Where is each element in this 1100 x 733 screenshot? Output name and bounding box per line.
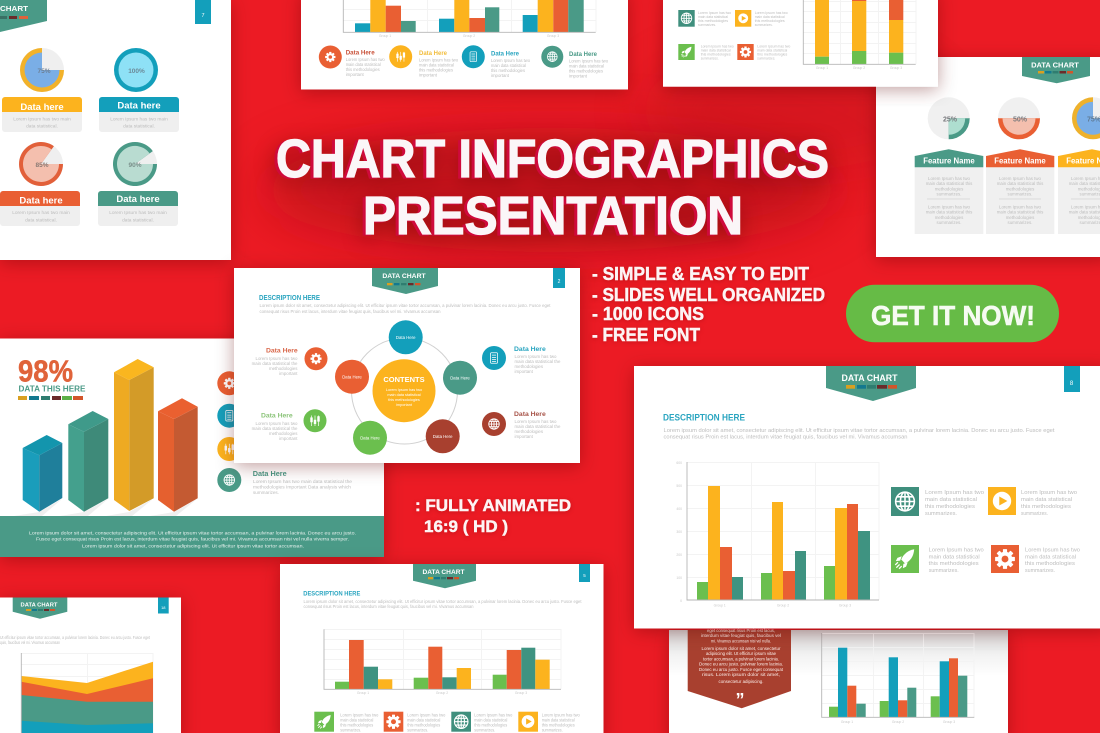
- node: top: Data Here: [396, 335, 416, 340]
- item: right bottom: Data Here: [514, 411, 546, 418]
- bar yellow: [114, 359, 154, 511]
- icon item: rocket: [314, 712, 379, 732]
- item: right top: main data statistical the: [514, 359, 561, 364]
- icon item: globe: summarizes.: [925, 511, 957, 517]
- center circle: contents: [372, 359, 436, 422]
- icon item: play: summarizes.: [1021, 511, 1048, 517]
- feature card teal: summarizes.: [937, 220, 961, 225]
- card: data here yellow: [2, 97, 82, 132]
- item: left top: [252, 347, 328, 376]
- card: data here green: data statistical.: [122, 218, 154, 224]
- icon item: play: this methodologies: [1021, 504, 1071, 510]
- bar chart: 400: [676, 507, 682, 511]
- item: right bottom: important: [514, 434, 534, 439]
- feature card teal: methodologies: [935, 186, 964, 191]
- donut 100%: [114, 48, 158, 92]
- icon item: rocket: main data statistical: [340, 718, 373, 722]
- teal footer band: [0, 516, 384, 557]
- feature card teal: methodologies: [935, 215, 964, 220]
- feature card teal: Lorem Ipsum has two: [928, 204, 971, 210]
- icon item: play: Lorem Ipsum has two: [542, 712, 580, 718]
- pie 25%: 25%: [943, 116, 958, 124]
- bar chart: 0: [680, 599, 682, 603]
- animation note: 16:9 ( HD ): [424, 517, 508, 536]
- icon item: gear: this methodologies: [407, 722, 441, 728]
- bar chart: Group 3: [547, 34, 559, 38]
- quote callout: eget consequat risus Proin est lacus,: [707, 628, 775, 633]
- item: yellow data here: main data statistical: [419, 62, 454, 68]
- icon item: gear: main data statistical: [757, 48, 787, 52]
- data here text: summarizes.: [253, 490, 279, 495]
- donut 75%: [20, 48, 64, 92]
- 3D bar chart: [14, 359, 198, 516]
- panel: top right stacked chart slide: [663, 0, 938, 87]
- item: yellow data here: important: [419, 72, 438, 78]
- description heading: DESCRIPTION HERE: [663, 413, 745, 424]
- node: right: [443, 361, 477, 395]
- item: blue data here: this methodologies: [491, 68, 526, 73]
- icon item: globe: main data statistical: [698, 15, 728, 19]
- animation note: : FULLY ANIMATED: [415, 496, 571, 515]
- card: data here yellow: Lorem Ipsum has two main: [13, 116, 71, 122]
- item: yellow data here: [389, 45, 459, 78]
- card: data here orange: Data here: [19, 196, 63, 206]
- bar chart: Group 1: [714, 604, 726, 608]
- icon item: rocket: Lorem Ipsum has two: [929, 548, 984, 554]
- bar teal: [68, 411, 108, 512]
- slide badge: DATA CHART: [382, 273, 426, 280]
- item: blue data here: important: [491, 73, 510, 78]
- icon item: globe: [451, 712, 513, 732]
- feature list: - 1000 ICONS: [592, 304, 704, 324]
- bar chart: 100: [676, 576, 682, 580]
- bar chart: [822, 633, 974, 724]
- card: data here teal blue: Data here: [117, 100, 161, 112]
- node: bottom right: [426, 419, 460, 453]
- card: data here teal blue: data statistical.: [123, 124, 155, 130]
- item: right bottom: main data statistical the: [514, 424, 561, 429]
- quote callout: interdum vitae feugiat quis, faucibus vel: [701, 633, 781, 638]
- icon item: rocket: summarizes.: [340, 728, 361, 732]
- pie 50%: 50%: [1013, 116, 1028, 124]
- icon item: play: this methodologies: [755, 19, 785, 23]
- button: get it now: [846, 285, 1059, 342]
- pie 25%: [928, 97, 970, 139]
- feature card orange: main data statistical this: [997, 210, 1044, 214]
- description heading: DESCRIPTION HERE: [303, 590, 361, 597]
- feature list: - SIMPLE & EASY TO EDIT: [592, 264, 809, 284]
- panel: bottom right chart slide: [669, 628, 1008, 733]
- slide number: 8: [1070, 381, 1074, 387]
- item: blue data here: [462, 45, 531, 78]
- item: right top: important: [514, 369, 534, 374]
- data here text: Lorem Ipsum has two main data statistical the: [253, 479, 353, 484]
- stacked bar chart: Group 2: [853, 66, 865, 70]
- icon item: play: this methodologies: [542, 722, 575, 728]
- item: teal data here: this methodologies: [569, 68, 604, 74]
- bar chart: Group 2: [777, 604, 789, 608]
- panel: donut charts slide: [0, 0, 231, 260]
- icon item: globe: this methodologies: [925, 504, 975, 510]
- bar chart: Group 3: [515, 691, 527, 695]
- item: blue data here: Lorem Ipsum has two: [491, 58, 531, 63]
- bar chart: Group 1: [379, 34, 391, 38]
- center circle: contents: main data statistical: [387, 393, 421, 397]
- stacked bar chart: Group 1: [816, 66, 828, 70]
- bar chart: [324, 629, 561, 695]
- slide badge: [372, 268, 438, 294]
- slide number: [158, 598, 169, 614]
- panel: bottom center chart slide: [280, 564, 604, 733]
- bar blue: [23, 435, 62, 512]
- card: data here green: [98, 191, 178, 226]
- feature card orange: Lorem Ipsum has two: [999, 176, 1042, 181]
- slide badge: [826, 366, 916, 401]
- icon item: globe: [891, 487, 984, 517]
- item: blue data here: Data Here: [491, 50, 519, 58]
- button: get it now: GET IT NOW!: [871, 300, 1035, 331]
- description text: consequat risus Proin est lacus, interdum vitae feugiat quis, faucibus vel mi. Vivamus accumsan: [260, 309, 441, 314]
- icon item: rocket: this methodologies: [929, 561, 979, 567]
- icon item: gear: [737, 44, 790, 60]
- icon item: gear: summarizes.: [407, 728, 428, 732]
- area chart: [21, 653, 153, 733]
- icon circles: [217, 371, 241, 492]
- icon item: rocket: [891, 545, 984, 574]
- quote callout: Donec eu arcu justo. Fusce eget consequat: [699, 667, 784, 672]
- feature card orange: Lorem Ipsum has two: [999, 204, 1042, 210]
- icon item: play: Lorem Ipsum has two: [1021, 490, 1077, 496]
- center circle: contents: important: [396, 403, 413, 407]
- item: left top: main data statistical the: [252, 361, 298, 366]
- bar chart: Group 1: [357, 691, 369, 695]
- title: [276, 129, 829, 246]
- bar chart: [343, 0, 596, 38]
- card: data here yellow: Data here: [20, 102, 64, 113]
- item: yellow data here: this methodologies: [419, 68, 454, 72]
- data here text: Data Here: [253, 469, 287, 478]
- description text: consequat risus Proin est lacus, interdum vitae feugiat quis, faucibus vel mi. Vivamus accumsan: [664, 434, 908, 440]
- bar chart: [676, 461, 879, 608]
- quote callout: Lorem ipsum dolor sit amet, consectetur: [702, 646, 781, 651]
- feature card teal: main data statistical this: [926, 210, 973, 214]
- bar chart: 200: [676, 553, 682, 557]
- title: CHART INFOGRAPHICS: [276, 129, 829, 189]
- item: orange data here: Lorem Ipsum has two: [346, 57, 385, 62]
- icon item: globe: this methodologies: [474, 722, 508, 728]
- slide number: 2: [558, 279, 561, 285]
- icon item: globe: [678, 10, 731, 27]
- item: right top: Data Here: [514, 346, 546, 353]
- bar chart: Group 2: [436, 691, 448, 695]
- item: teal data here: important: [569, 74, 588, 78]
- icon item: gear: Lorem Ipsum has two: [1025, 548, 1080, 554]
- card: data here yellow: data statistical.: [26, 124, 58, 130]
- icon item: play: summarizes.: [755, 23, 773, 27]
- item: teal data here: Data Here: [569, 51, 597, 58]
- bar chart: Group 3: [943, 720, 955, 724]
- item: teal data here: [541, 46, 609, 78]
- quote callout: risus. Lorem ipsum dolor sit amet,: [702, 672, 780, 677]
- feature card orange: methodologies: [1006, 186, 1035, 191]
- panel: contents cycle slide: [234, 268, 580, 463]
- icon item: gear: this methodologies: [757, 52, 788, 56]
- feature list: - SLIDES WELL ORGANIZED: [592, 285, 825, 305]
- feature list: [592, 264, 825, 345]
- animation note: [415, 496, 571, 536]
- node: bottom left: Data Here: [360, 436, 380, 440]
- quote callout: mi. Vivamus accumsan nisi vel nulla.: [711, 638, 771, 644]
- item: teal data here: main data statistical: [569, 64, 604, 68]
- description text: Lorem ipsum dolor sit amet, consectetur adipiscing elit. Ut efficitur ipsum vitae tortor accumsan, a pulvinar lorem lacinia. Donec eu arcu justo. Fusce eget: [664, 428, 1055, 434]
- slide number: 18: [161, 605, 166, 610]
- icon item: play: main data statistical: [542, 718, 575, 722]
- card: data here teal blue: Lorem Ipsum has two main: [110, 116, 168, 122]
- quote callout: ”: [736, 690, 744, 710]
- slide badge: [413, 564, 476, 588]
- description text: [0, 635, 151, 645]
- item: orange data here: this methodologies: [346, 67, 380, 72]
- item: left top: methodologies: [269, 366, 298, 371]
- item: orange data here: Data Here: [346, 50, 375, 56]
- feature card orange: [986, 149, 1054, 234]
- slide badge: DATA CHART: [21, 602, 58, 608]
- bar chart: 500: [676, 484, 682, 488]
- quote callout: tortor accumsan, a pulvinar lorem lacinia.: [703, 656, 779, 662]
- icon item: rocket: main data statistical: [929, 554, 980, 560]
- icon item: gear: [991, 545, 1080, 574]
- card: data here green: Lorem Ipsum has two main: [109, 210, 167, 216]
- donut 75%: 75%: [37, 68, 51, 75]
- icon item: globe: summarizes.: [698, 23, 716, 27]
- icon item: gear: Lorem Ipsum has two: [757, 44, 790, 48]
- node: left: Data Here: [342, 374, 362, 380]
- icon item: gear: summarizes.: [1025, 568, 1055, 574]
- icon item: rocket: summarizes.: [701, 56, 719, 60]
- feature list: - FREE FONT: [592, 325, 700, 345]
- description text: [304, 599, 582, 609]
- stacked bar chart: Group 3: [890, 66, 902, 70]
- icon item: gear: summarizes.: [757, 56, 775, 60]
- subheading: DATA THIS HERE: [18, 385, 86, 394]
- pie 50%: [998, 97, 1040, 139]
- center circle: contents: Lorem Ipsum has two: [386, 388, 422, 392]
- slide number: [195, 0, 211, 24]
- item: left bottom: methodologies: [269, 431, 298, 436]
- description text: [260, 303, 551, 314]
- teal footer band: Fusce eget consequat risus Proin est lacus, interdum vitae feugiat quis, faucibus vel mi. Vivamus accumsan nisi vel nulla viverra semper.: [36, 536, 349, 542]
- item: left bottom: [252, 409, 326, 441]
- icon item: globe: this methodologies: [698, 19, 728, 23]
- node: left: [335, 360, 369, 394]
- quote callout: adipiscing elit. Ut efficitur ipsum vitae: [706, 651, 777, 656]
- icon item: rocket: this methodologies: [340, 722, 374, 728]
- description text: quis, faucibus vel mi. Vivamus accumsan: [0, 640, 60, 645]
- card: data here teal blue: [99, 97, 179, 132]
- item: teal data here: Lorem Ipsum has two: [569, 58, 609, 64]
- slide badge: [0, 0, 47, 32]
- feature card teal: [915, 149, 983, 234]
- item: left top: Data Here: [266, 348, 298, 355]
- slide number: 7: [201, 13, 205, 19]
- icon item: play: main data statistical: [755, 15, 785, 19]
- bar chart: Group 1: [841, 720, 853, 724]
- item: left bottom: main data statistical the: [252, 426, 298, 431]
- icon item: globe: Lorem Ipsum has two: [698, 11, 731, 15]
- feature card orange: methodologies: [1006, 215, 1035, 220]
- center circle: contents: this methodologies: [388, 398, 420, 402]
- description heading: DESCRIPTION HERE: [259, 293, 320, 302]
- feature card teal: Lorem Ipsum has two: [928, 176, 971, 181]
- item: right top: methodologies: [514, 364, 544, 369]
- item: right bottom: Lorem Ipsum has two: [514, 419, 557, 424]
- panel: big bar chart slide: [634, 366, 1100, 628]
- bar chart: Group 2: [463, 34, 475, 38]
- icon item: play: [518, 712, 580, 732]
- card: data here orange: data statistical.: [25, 218, 57, 224]
- icon item: gear: [384, 712, 446, 732]
- item: left bottom: Lorem Ipsum has two: [256, 421, 298, 426]
- icon item: globe: Lorem Ipsum has two: [474, 712, 513, 718]
- icon item: gear: this methodologies: [1025, 561, 1075, 567]
- headline 98%: 98%: [18, 354, 73, 389]
- item: yellow data here: Data Here: [419, 50, 447, 57]
- description text: consequat risus Proin est lacus, interdum vitae feugiat quis, faucibus vel mi. Vivamus accumsan: [304, 604, 474, 609]
- feature card teal: Feature Name: [923, 156, 975, 165]
- description text: Lorem ipsum dolor sit amet, consectetur adipiscing elit. Ut efficitur ipsum vitae tortor accumsan, a pulvinar lorem lacinia. Donec eu arcu justo. Fusce eget: [304, 599, 582, 604]
- card: data here orange: Lorem Ipsum has two main: [12, 210, 70, 216]
- item: orange data here: main data statistical: [346, 62, 381, 67]
- icon item: rocket: [678, 44, 734, 60]
- item: right top: Lorem Ipsum has two: [514, 354, 557, 359]
- icon item: rocket: Lorem Ipsum has two: [701, 44, 734, 48]
- slide badge: [1022, 57, 1090, 83]
- donut 90%: [113, 142, 157, 186]
- feature card orange: Feature Name: [994, 156, 1046, 165]
- node: bottom left: [353, 421, 387, 455]
- icon item: rocket: this methodologies: [701, 52, 731, 56]
- icon item: globe: main data statistical: [474, 718, 507, 722]
- slide number: [579, 564, 590, 582]
- item: left top: Lorem Ipsum has two: [256, 356, 298, 361]
- icon item: gear: main data statistical: [407, 718, 440, 722]
- donut 100%: 100%: [128, 68, 145, 75]
- icon item: globe: summarizes.: [474, 728, 495, 732]
- node: right: Data Here: [450, 376, 470, 380]
- feature card yellow: [1058, 149, 1100, 234]
- description text: Ut efficitur ipsum vitae tortor accumsan, a pulvinar lorem lacinia. Donec eu arcu justo. Fusce eget: [0, 635, 151, 640]
- item: right top: [482, 346, 561, 374]
- quote callout: Donec eu arcu justo. pulvinar lorem lacinia.: [699, 662, 783, 666]
- slide badge: DATA CHART: [1031, 60, 1079, 70]
- donut 85%: [19, 142, 63, 186]
- item: left bottom: important: [279, 436, 298, 441]
- bar chart: 600: [676, 461, 682, 465]
- icon item: gear: Lorem Ipsum has two: [407, 712, 446, 718]
- slide number: [1064, 366, 1080, 392]
- donut 90%: 90%: [128, 162, 142, 169]
- icon item: play: main data statistical: [1021, 497, 1072, 503]
- slide badge: DATA CHART: [841, 373, 898, 383]
- panel: feature pies slide: [876, 57, 1100, 257]
- pie 75%: [1072, 97, 1100, 139]
- item: right bottom: methodologies: [514, 429, 544, 434]
- feature card teal: main data statistical this: [926, 181, 973, 186]
- teal footer band: Lorem ipsum dolor sit amet, consectetur adipiscing elit. Ut efficitur ipsum vitae tortor accumsan.: [82, 544, 304, 548]
- item: orange data here: [319, 46, 385, 77]
- slide number: 5: [583, 573, 586, 578]
- item: blue data here: main data statistical: [491, 63, 526, 68]
- title: PRESENTATION: [363, 186, 743, 246]
- icon item: play: [735, 10, 788, 27]
- center circle: contents: CONTENTS: [383, 375, 425, 384]
- icon item: gear: main data statistical: [1025, 554, 1076, 560]
- ring connector: [352, 338, 458, 444]
- node: top: [389, 320, 423, 354]
- bar orange: [158, 398, 198, 512]
- node: bottom right: Data Here: [433, 434, 453, 439]
- feature card orange: main data statistical this: [997, 181, 1044, 186]
- bar chart: Group 3: [839, 604, 851, 608]
- item: orange data here: important: [346, 72, 364, 77]
- icon item: rocket: Lorem Ipsum has two: [340, 712, 379, 718]
- feature card orange: summarizes.: [1008, 220, 1032, 225]
- card: data here orange: [0, 191, 80, 226]
- panel: top center chart slide: [301, 0, 628, 90]
- icon item: play: [988, 487, 1077, 517]
- data here text: methodologies Important Data analysis which: [253, 484, 352, 490]
- slide badge: DATA CHART: [422, 569, 464, 576]
- icon item: globe: main data statistical: [925, 497, 977, 503]
- slide number: [553, 268, 565, 288]
- item: yellow data here: Lorem Ipsum has two: [419, 58, 459, 62]
- description text: Lorem ipsum dolor sit amet, consectetur adipiscing elit. Ut efficitur ipsum vitae tortor accumsan, a pulvinar lorem lacinia. Donec eu arcu justo. Fusce eget: [260, 303, 551, 308]
- panel: 3D bars slide: [0, 338, 384, 557]
- slide badge: CHART: [0, 4, 28, 13]
- stacked bar chart: [803, 0, 916, 70]
- item: left bottom: Data Here: [261, 413, 293, 420]
- quote callout: [688, 628, 791, 710]
- slide badge: [13, 598, 67, 619]
- data here text: [253, 469, 353, 495]
- card: data here green: Data here: [116, 194, 160, 205]
- donut 85%: 85%: [35, 162, 49, 169]
- colour strips: [18, 396, 83, 400]
- icon item: rocket: main data statistical: [701, 48, 731, 52]
- icon item: play: summarizes.: [542, 728, 563, 732]
- bar chart: 300: [676, 530, 682, 534]
- icon item: rocket: summarizes.: [929, 568, 959, 574]
- bar chart: Group 2: [892, 720, 904, 724]
- icon item: globe: Lorem Ipsum has two: [925, 490, 984, 496]
- feature card teal: summarizes.: [937, 192, 961, 196]
- quote callout: consectetur adipiscing.: [718, 679, 764, 684]
- description text: [664, 428, 1055, 440]
- icon item: play: Lorem Ipsum has two: [755, 11, 788, 15]
- feature card orange: summarizes.: [1008, 192, 1032, 196]
- panel: area chart slide: [0, 598, 181, 733]
- item: left top: important: [279, 371, 298, 376]
- item: right bottom: [482, 411, 561, 439]
- teal footer band: Lorem ipsum dolor sit amet, consectetur adipiscing elit. Ut efficitur ipsum vitae tortor accumsan, a pulvinar lorem lacinia. Donec eu arcu justo.: [29, 530, 356, 536]
